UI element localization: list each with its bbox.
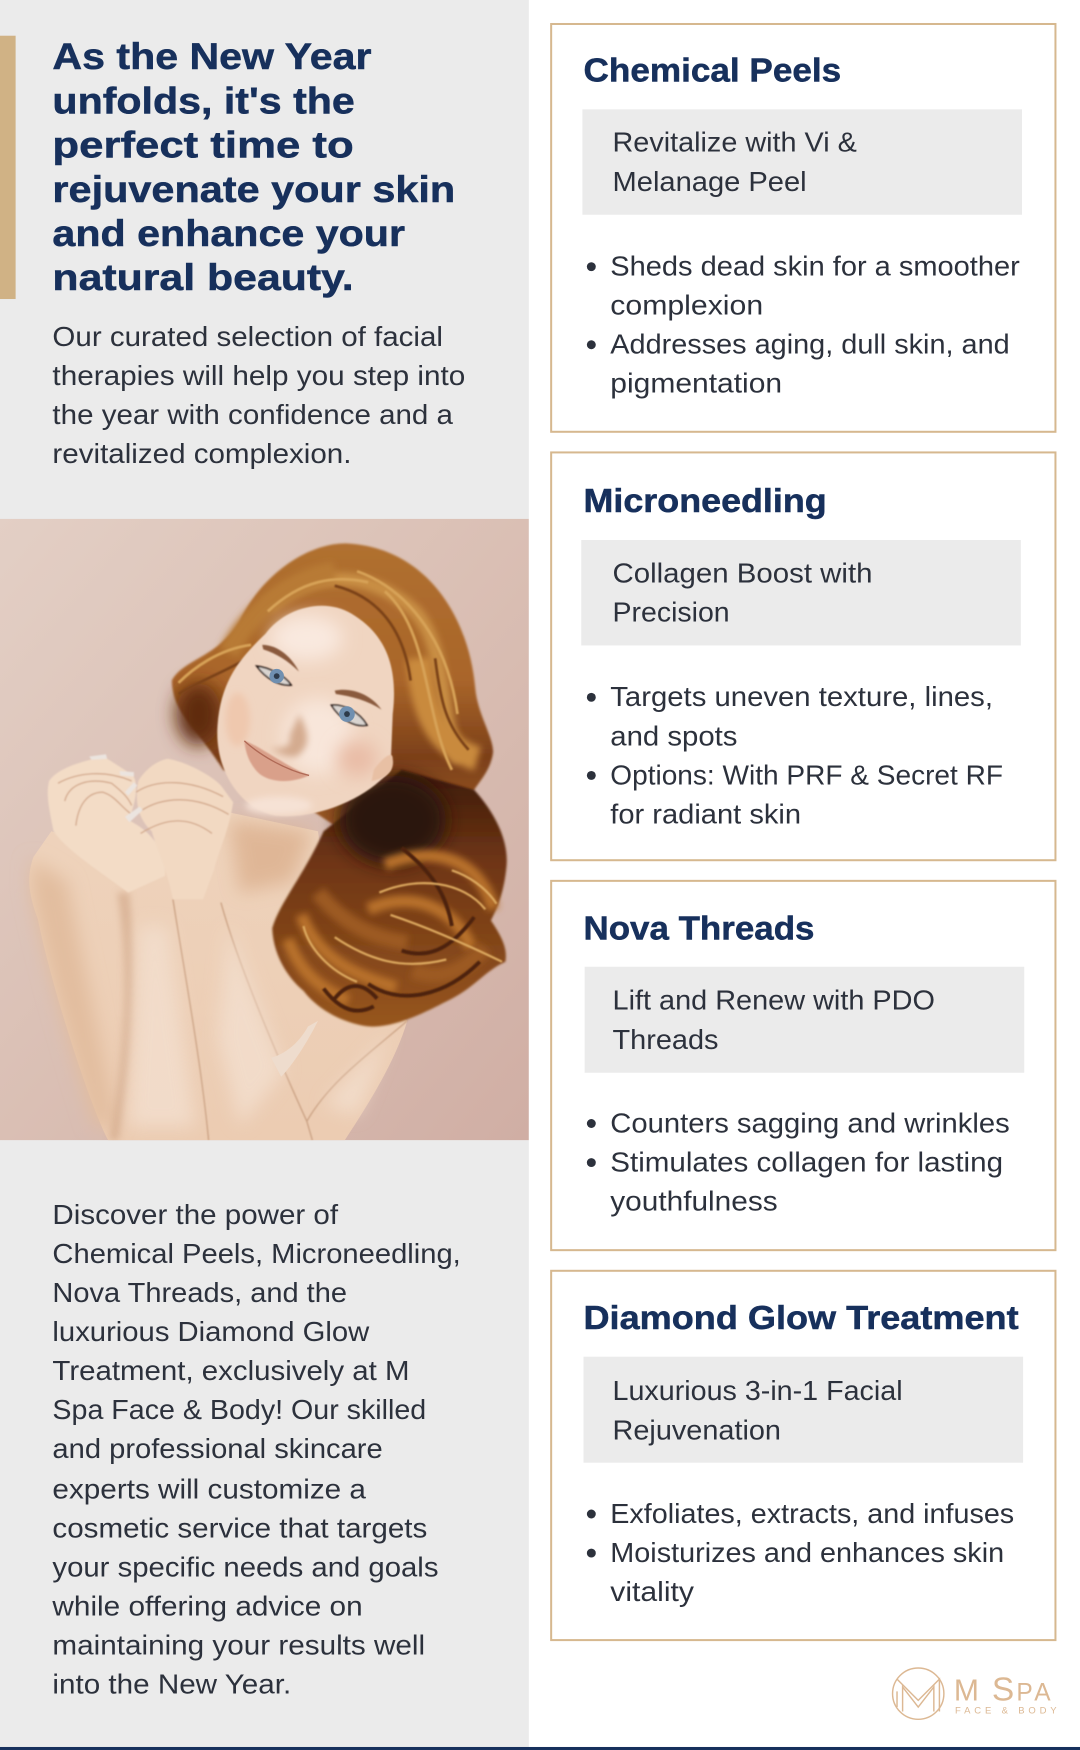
- bullet list: nova threads: Counters sagging and wrinkles: [610, 1107, 1010, 1138]
- heading: chemical peels: Chemical Peels: [584, 52, 841, 89]
- subtitle box: luxurious facial: Luxurious 3-in-1 Facial: [613, 1375, 903, 1406]
- eyebrows: [262, 645, 382, 710]
- bullet list: chemical peels: [587, 251, 1020, 399]
- intro paragraph: Our curated selection of facial: [52, 321, 443, 352]
- discover paragraph: Discover the power of: [52, 1199, 338, 1230]
- gold accent bar: [0, 36, 16, 299]
- ear: [372, 755, 393, 781]
- discover paragraph: your specific needs and goals: [52, 1551, 438, 1582]
- discover paragraph: [51, 1199, 461, 1700]
- heading: diamond glow treatment: Diamond Glow Treatment: [584, 1300, 1019, 1337]
- icon: circled M monogram: [893, 1668, 944, 1719]
- bullet list: nova threads: Stimulates collagen for lasting: [610, 1146, 1003, 1177]
- bullet list: nova threads: youthfulness: [610, 1186, 778, 1217]
- bottom navy bar: [0, 1747, 1080, 1750]
- intro paragraph: revitalized complexion.: [52, 438, 351, 469]
- discover paragraph: maintaining your results well: [52, 1630, 425, 1661]
- panel: diamond glow treatment: [551, 1271, 1055, 1640]
- intro paragraph: the year with confidence and a: [52, 399, 454, 430]
- discover paragraph: Spa Face & Body! Our skilled: [52, 1394, 426, 1425]
- subtitle box: revitalize: Melanage Peel: [613, 166, 807, 197]
- subtitle box: lift and renew: [585, 967, 1024, 1073]
- face: [217, 606, 394, 816]
- subtitle box: lift and renew: Lift and Renew with PDO: [613, 985, 935, 1016]
- eyes: [257, 666, 367, 726]
- discover paragraph: and professional skincare: [52, 1433, 383, 1464]
- discover paragraph: while offering advice on: [51, 1591, 363, 1622]
- subtitle box: luxurious facial: Rejuvenation: [613, 1414, 781, 1445]
- bullet list: chemical peels: Addresses aging, dull skin, and: [610, 329, 1010, 360]
- headline: [52, 36, 455, 298]
- discover paragraph: into the New Year.: [52, 1669, 291, 1700]
- discover paragraph: Nova Threads, and the: [52, 1277, 347, 1308]
- bullet list: diamond glow: Moisturizes and enhances skin: [610, 1537, 1004, 1568]
- bullet list: diamond glow: [587, 1498, 1014, 1607]
- bra strap: [271, 1021, 318, 1077]
- lips: [244, 741, 309, 781]
- bullet list: microneedling: for radiant skin: [610, 798, 801, 829]
- panel: microneedling: [551, 452, 1055, 860]
- subtitle box: collagen boost: Precision: [613, 596, 730, 627]
- headline: and enhance your: [52, 213, 405, 254]
- headline: As the New Year: [52, 36, 372, 77]
- hands: [48, 754, 233, 899]
- upper hair: [172, 543, 493, 848]
- logo: M Spa Face & Body: [893, 1668, 1057, 1719]
- headline: natural beauty.: [52, 257, 354, 298]
- photo: smiling woman with red curly hair: [0, 519, 529, 1140]
- bullet list: microneedling: and spots: [610, 720, 737, 751]
- intro paragraph: [52, 321, 465, 469]
- discover paragraph: cosmetic service that targets: [52, 1512, 427, 1543]
- bullet list: microneedling: Targets uneven texture, lines,: [610, 681, 993, 712]
- intro paragraph: therapies will help you step into: [52, 360, 465, 391]
- headline: unfolds, it's the: [52, 80, 355, 121]
- subtitle box: collagen boost: Collagen Boost with: [613, 557, 872, 588]
- bullet list: nova threads: [587, 1107, 1010, 1217]
- logo wordmark: PA: [1016, 1679, 1054, 1706]
- panel: nova threads: [551, 881, 1055, 1250]
- body and arms: [29, 811, 407, 1140]
- subtitle box: revitalize: Revitalize with Vi &: [613, 127, 857, 158]
- bullet list: microneedling: Options: With PRF & Secret RF: [610, 759, 1003, 790]
- discover paragraph: Chemical Peels, Microneedling,: [52, 1238, 461, 1269]
- subtitle box: lift and renew: Threads: [613, 1024, 719, 1055]
- left panel background: [0, 0, 529, 1750]
- bullet list: diamond glow: Exfoliates, extracts, and infuses: [610, 1498, 1014, 1529]
- subtitle box: luxurious facial: [584, 1357, 1023, 1463]
- panel: chemical peels: [551, 24, 1055, 432]
- bullet list: chemical peels: complexion: [610, 290, 763, 321]
- bullet list: microneedling: [587, 681, 1003, 829]
- nose shading: [270, 714, 307, 757]
- heading: microneedling: Microneedling: [584, 483, 827, 520]
- bullet list: chemical peels: pigmentation: [610, 368, 782, 399]
- discover paragraph: luxurious Diamond Glow: [52, 1316, 370, 1347]
- logo wordmark: M: [954, 1674, 979, 1707]
- logo wordmark: S: [992, 1671, 1014, 1708]
- bullet list: diamond glow: vitality: [610, 1576, 694, 1607]
- logo tagline: FACE & BODY: [955, 1706, 1057, 1717]
- heading: nova threads: Nova Threads: [584, 910, 814, 947]
- discover paragraph: Treatment, exclusively at M: [52, 1355, 409, 1386]
- subtitle box: collagen boost: [581, 540, 1021, 645]
- headline: rejuvenate your skin: [52, 169, 455, 210]
- headline: perfect time to: [52, 124, 354, 165]
- discover paragraph: experts will customize a: [52, 1473, 366, 1504]
- subtitle box: revitalize: [582, 109, 1022, 215]
- bullet list: chemical peels: Sheds dead skin for a smoother: [610, 251, 1020, 282]
- lower curls of hair over chest: [272, 770, 507, 1027]
